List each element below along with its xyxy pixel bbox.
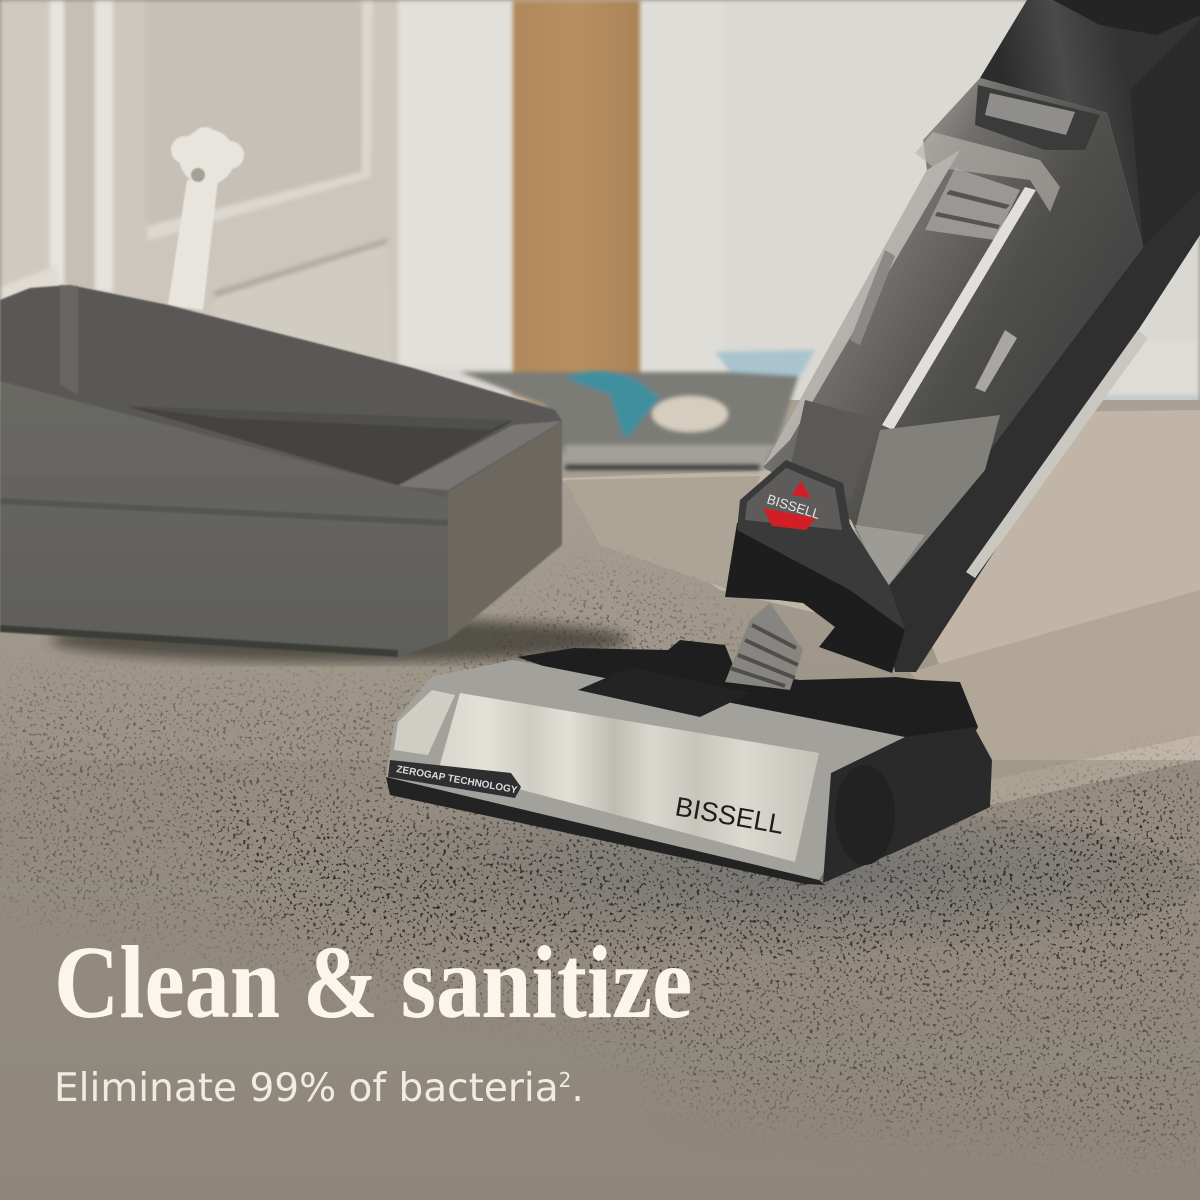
litter box: [0, 285, 630, 662]
neck with brand badge: BISSELL: [765, 492, 822, 522]
neck with brand badge: [725, 460, 905, 673]
water tank: [763, 78, 1143, 590]
title: Clean & sanitize: [54, 925, 692, 1040]
flexible hose: [725, 603, 803, 690]
litter scoop: [168, 127, 244, 310]
wall and doors background: [0, 0, 1200, 430]
subtitle: Eliminate 99% of bacteria2.: [54, 1066, 584, 1111]
brush roller: [439, 693, 819, 862]
vacuum handle body: [880, 0, 1200, 672]
cat mat with toy: [460, 350, 815, 470]
Bissell logo: BISSELL: [673, 791, 786, 840]
floor: [0, 400, 1200, 1200]
ZeroGap label: ZEROGAP TECHNOLOGY: [395, 764, 518, 796]
cat scratching post: [508, 0, 640, 418]
vacuum cleaner: [386, 0, 1200, 885]
cleaning head: [386, 603, 992, 885]
